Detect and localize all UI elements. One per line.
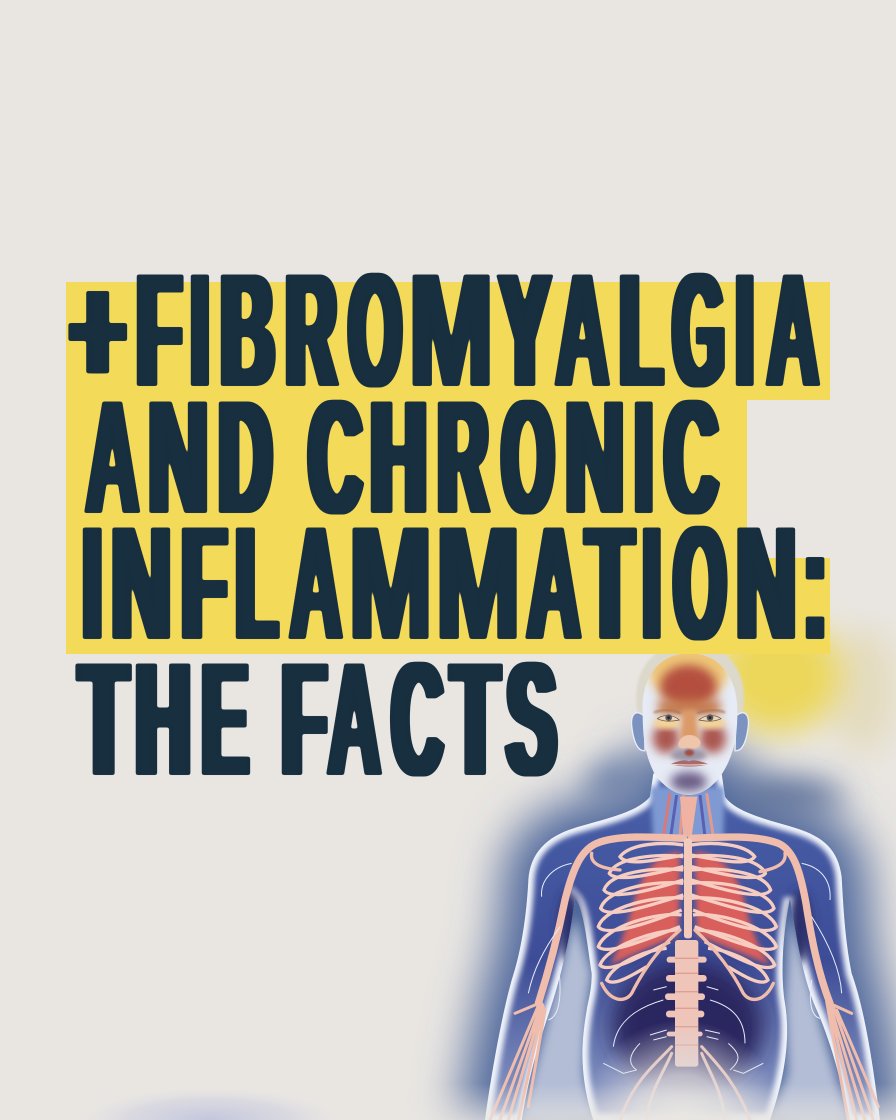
- title line 3: F: [182, 494, 226, 674]
- sternum: [684, 838, 692, 938]
- left forearm nerves: [490, 1002, 545, 1120]
- title line 3: I: [83, 494, 101, 674]
- title line 1: I: [736, 241, 753, 421]
- title line 1: I: [191, 241, 208, 421]
- left lung: [610, 852, 680, 965]
- forehead yellow glow: [646, 654, 732, 700]
- title line 3: A: [527, 494, 580, 674]
- title line 1: B: [221, 241, 274, 421]
- lungs: [610, 852, 770, 965]
- title line 4: T: [452, 630, 498, 810]
- title line 3: O: [674, 494, 725, 674]
- title line 3: M: [436, 494, 520, 674]
- head and face: [643, 638, 737, 795]
- torso and arms silhouette: [477, 767, 890, 1120]
- right collar and arm nerve: [692, 837, 830, 1003]
- title line 3: :: [804, 494, 826, 674]
- costal arch right: [695, 930, 773, 999]
- body light edge glow: [485, 773, 880, 1120]
- title line 1: O: [349, 241, 401, 421]
- title line 1: A: [556, 241, 608, 421]
- title line 3: [82, 272, 826, 764]
- title line 3: I: [643, 494, 660, 674]
- title line 1: F: [137, 241, 181, 421]
- title line 4: C: [392, 630, 442, 810]
- infographic artwork: [66, 282, 896, 1120]
- title line 3: T: [587, 494, 632, 674]
- spine vertebrae: [665, 940, 707, 1067]
- glow: pale gap right of torso: [770, 917, 848, 1120]
- glow: halo right of neck: [730, 780, 843, 813]
- bottom fade of abdomen: [582, 1020, 782, 1120]
- title line 4: T: [80, 630, 127, 810]
- neck highlight: [650, 787, 725, 840]
- ribs right: [691, 844, 776, 982]
- face base: [643, 653, 737, 795]
- title line 2: N: [565, 368, 625, 548]
- nose bridge: [679, 710, 699, 740]
- arm shadow left: [558, 890, 582, 963]
- title line 1: [68, 241, 820, 768]
- chin shadow: [670, 772, 707, 792]
- costal arch left: [602, 930, 680, 999]
- title line 4: [75, 272, 758, 810]
- upper lip shadow: [670, 748, 707, 762]
- collar loops: [591, 853, 620, 870]
- title line 4: A: [328, 630, 380, 810]
- bottom fade of whole figure: [400, 1083, 896, 1120]
- title line 3: N: [736, 494, 797, 674]
- title line 2: A: [86, 368, 138, 548]
- mouth line: [670, 764, 709, 765]
- right cheek: [699, 723, 726, 753]
- hair: [636, 643, 744, 723]
- title line 1: R: [286, 241, 336, 421]
- nose: [678, 735, 701, 749]
- title line 2: D: [219, 368, 271, 548]
- title line 3: N: [111, 494, 172, 674]
- thin white nerve lines: [528, 863, 842, 1073]
- nostril shadow: [685, 749, 694, 756]
- left collar and arm nerve: [538, 837, 683, 1003]
- highlight: line 2: [66, 400, 747, 558]
- title line 4: E: [202, 630, 248, 810]
- title line 2: C: [309, 368, 361, 548]
- figure: human body with nerves and ribs: [400, 617, 896, 1120]
- brow band: [658, 700, 720, 715]
- ribs left: [598, 844, 683, 982]
- forehead red area: [660, 665, 717, 708]
- title line 2: R: [438, 368, 488, 548]
- title line 3: A: [290, 494, 341, 674]
- eyes: [657, 714, 721, 721]
- pelvic nerves: [620, 1047, 750, 1120]
- left cheek: [653, 723, 679, 753]
- title line 4: S: [507, 630, 556, 810]
- title line 1: Y: [500, 241, 550, 421]
- highlight: line 3: [66, 558, 830, 654]
- title line 1: +: [71, 241, 124, 421]
- highlight bars behind title: [66, 282, 830, 654]
- ears: [632, 713, 748, 751]
- arm shadow right: [788, 890, 812, 963]
- title line 3: L: [236, 494, 277, 674]
- brows: [654, 710, 725, 713]
- lips: [670, 760, 709, 766]
- left eye glow: [653, 718, 681, 729]
- glow: blue halo around body: [485, 773, 880, 1120]
- glow: pale gap left of torso: [522, 917, 593, 1120]
- title line 1: A: [767, 241, 818, 421]
- title line 4: F: [282, 630, 326, 810]
- title line 2: O: [502, 368, 553, 548]
- glow: beige haze at right edge: [827, 627, 896, 753]
- right lung: [695, 852, 770, 965]
- title line 4: H: [136, 630, 190, 810]
- body base color: [492, 774, 873, 1114]
- title line 1: G: [673, 241, 724, 421]
- title line 3: M: [349, 494, 432, 674]
- title line 1: M: [409, 241, 493, 421]
- glow: yellow halo right of head: [715, 617, 842, 733]
- neck nerves: [663, 793, 713, 837]
- right forearm nerves: [827, 1002, 878, 1120]
- title line 2: [84, 272, 724, 768]
- background glow: lower left blue blob: [70, 1050, 350, 1120]
- title: [68, 241, 826, 810]
- title line 2: I: [635, 368, 652, 548]
- title line 2: H: [371, 368, 426, 548]
- title line 2: N: [148, 368, 209, 548]
- title line 2: C: [665, 368, 717, 548]
- collar and arm nerves: [490, 837, 878, 1120]
- right eye glow: [698, 718, 726, 729]
- title line 1: L: [620, 241, 662, 421]
- highlight: line 1: [66, 282, 830, 400]
- abdomen dark core: [612, 962, 762, 1092]
- glow: halo left of neck: [587, 760, 647, 807]
